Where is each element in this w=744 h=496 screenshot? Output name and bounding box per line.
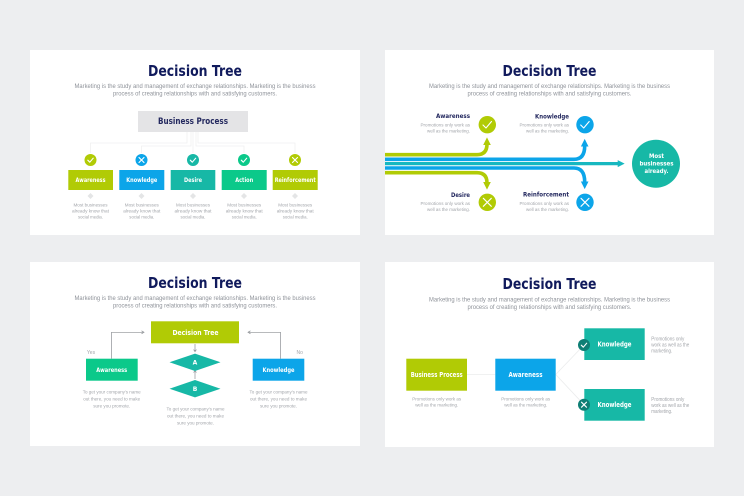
text: centre: out there, you need to make [167,414,224,420]
diamond: B [170,380,220,397]
description: Marketing is the study and management of exchange relationships. Marketing is the business [74,295,316,302]
item: Awareness: Awareness [436,113,470,120]
arrows: branching lines [385,138,624,188]
item: Awareness [68,154,113,220]
text: centre: To get your company's name [166,406,225,412]
item: Reinforcement: already know that [277,208,314,214]
item: Desire: Promotions only work as [420,201,471,207]
item: Knowledge: social media. [129,214,154,220]
item: Awareness: Promotions only work as [420,122,471,128]
panel: branching arrows [385,50,714,235]
flow arrows [112,331,280,379]
item: Awareness: Most businesses [74,202,108,208]
text: Knowledge [250,390,308,410]
text: Knowledge bottom: Promotions only [651,397,685,403]
item: Action [222,154,267,220]
text: Knowledge bottom [651,397,689,415]
diamond: B: B [193,386,198,393]
text: Knowledge: To get your company's name [250,390,308,396]
text: Awareness: well as the marketing. [504,402,547,408]
text: Knowledge: sure you promote. [260,404,297,410]
connector lines [467,345,584,405]
box: Awareness: Awareness [96,367,128,374]
description [74,83,316,98]
item: Awareness: already know that [72,208,110,214]
item: Action: Action [235,177,253,184]
text: Knowledge bottom: marketing. [651,409,672,415]
text: Knowledge top [651,336,689,354]
item: Reinforcement: Promotions only work as [520,201,570,207]
item: Knowledge [520,114,594,134]
box: Knowledge: Knowledge [262,367,294,374]
box: Knowledge [253,359,304,381]
box: Business Process: Business Process [411,371,463,379]
item: Action: social media. [232,214,257,220]
item: Desire [171,154,215,220]
item: Desire: well as the marketing. [427,207,470,213]
description [429,296,671,311]
box: Decision Tree: Decision Tree [172,328,218,337]
description: Marketing is the study and management of exchange relationships. Marketing is the business [429,296,671,304]
item: Knowledge: Promotions only work as [520,122,570,128]
text: centre [166,406,225,426]
label: No: No [296,350,303,356]
box: Knowledge top: Knowledge [598,340,632,348]
description [429,83,671,98]
description: process of creating relationships with and satisfying customers. [468,90,632,98]
box: Awareness [86,359,138,381]
item: Reinforcement: Reinforcement [523,192,569,198]
description: Marketing is the study and management of exchange relationships. Marketing is the business [429,83,671,90]
box: Decision Tree [151,321,239,343]
box: Knowledge bottom: Knowledge [598,401,632,409]
icon: check [578,339,590,351]
text: Knowledge: out there, you need to make [250,396,307,402]
item: Knowledge [119,154,164,220]
item: Desire: already know that [174,208,212,214]
label: Yes: Yes [87,350,96,356]
item: Knowledge: well as the marketing. [526,128,569,134]
box: Awareness [495,359,556,391]
item: Awareness [420,113,496,134]
description: process of creating relationships with and satisfying customers. [113,302,277,310]
description [74,295,316,310]
item: Desire [420,192,496,213]
item: Awareness: Awareness [76,177,106,184]
item: Knowledge: Knowledge [535,114,569,120]
text: centre: sure you promote. [177,420,214,426]
item: Reinforcement: Most businesses [278,202,313,208]
diamond: A: A [193,360,198,366]
text: Awareness [83,390,141,410]
heading box: Business Process: Business Process [158,116,228,126]
text: Awareness: Promotions only work as [501,396,551,402]
title: Decision Tree [502,275,596,293]
box: Awareness: Awareness [508,371,543,379]
text: Knowledge top: marketing. [651,348,672,354]
item: Awareness: well as the marketing. [427,128,470,134]
callout: most businesses: already. [644,167,668,175]
box: Knowledge top [584,328,645,360]
box: Knowledge bottom [584,389,645,421]
icon: cross [578,399,590,411]
title: Decision Tree [502,62,596,80]
diamond: A [170,354,220,371]
description: Marketing is the study and management of exchange relationships. Marketing is the business [74,83,316,90]
item: Desire: social media. [180,214,206,220]
text: Awareness: sure you promote. [93,404,130,410]
item: Action: Most businesses [227,202,262,208]
item: Desire: Desire [451,192,470,199]
title: Decision Tree [148,62,242,80]
callout: most businesses: businesses [640,160,674,168]
item: Knowledge: Most businesses [125,202,159,208]
item: Desire: Desire [184,177,202,184]
text: Knowledge top: Promotions only [651,336,685,342]
connector lines [90,132,295,153]
item: Desire: Most businesses [176,202,211,208]
item: Reinforcement [273,154,318,220]
item: Awareness: social media. [78,214,103,220]
item: Knowledge: Knowledge [126,177,157,184]
text: Awareness: out there, you need to make [83,396,140,402]
heading box: Business Process [138,111,248,132]
text: Knowledge bottom: work as well as the [651,403,689,409]
title: Decision Tree [148,274,242,292]
callout: most businesses [632,140,680,188]
text: Business Process: well as the marketing. [415,402,458,408]
callout: most businesses: Most [649,152,664,160]
text: Awareness: To get your company's name [83,390,141,396]
description: process of creating relationships with and satisfying customers. [113,90,277,98]
box: Business Process [406,359,467,391]
text: Awareness [501,396,551,408]
description: process of creating relationships with and satisfying customers. [468,304,632,311]
item: Knowledge: already know that [123,208,161,214]
item: Reinforcement: Reinforcement [275,177,316,184]
item: Reinforcement [520,192,594,213]
panel: business process tree [30,50,360,235]
panel: left-to-right tree [385,262,714,447]
text: Knowledge top: work as well as the [651,342,689,348]
text: Business Process: Promotions only work as [412,396,462,402]
text: Business Process [412,396,462,408]
panel: yes/no flowchart [30,262,360,446]
item: Action: already know that [226,208,263,214]
item: Reinforcement: well as the marketing. [526,207,569,213]
item: Reinforcement: social media. [283,214,308,220]
